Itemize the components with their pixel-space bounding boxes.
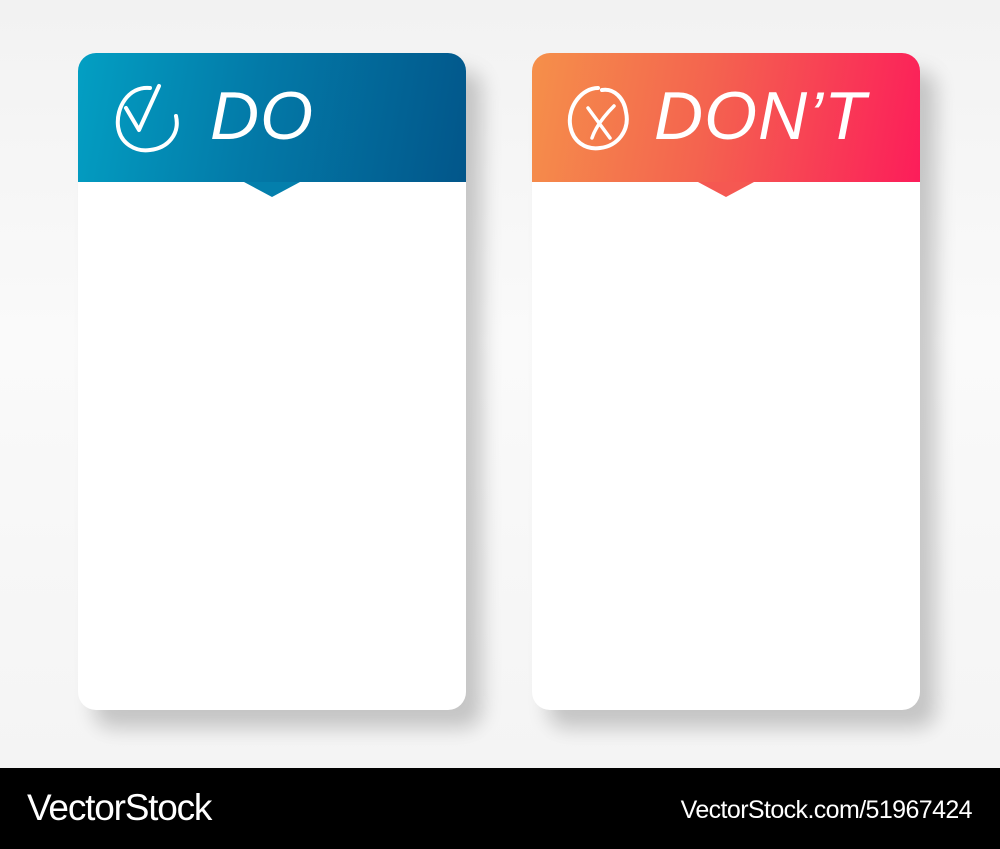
url text: VectorStock.com/51967424 [681, 796, 972, 824]
panel: do [78, 53, 466, 710]
header: dont [532, 53, 920, 182]
panel: dont [532, 53, 920, 710]
heading: DONT: DON’T [654, 78, 867, 154]
footer bar [0, 768, 1000, 849]
logo text: VectorStock [27, 787, 211, 828]
icon: check circle [116, 84, 179, 152]
heading: DO: DO [210, 78, 314, 154]
header: do [78, 53, 466, 182]
icon: x circle [568, 86, 629, 150]
